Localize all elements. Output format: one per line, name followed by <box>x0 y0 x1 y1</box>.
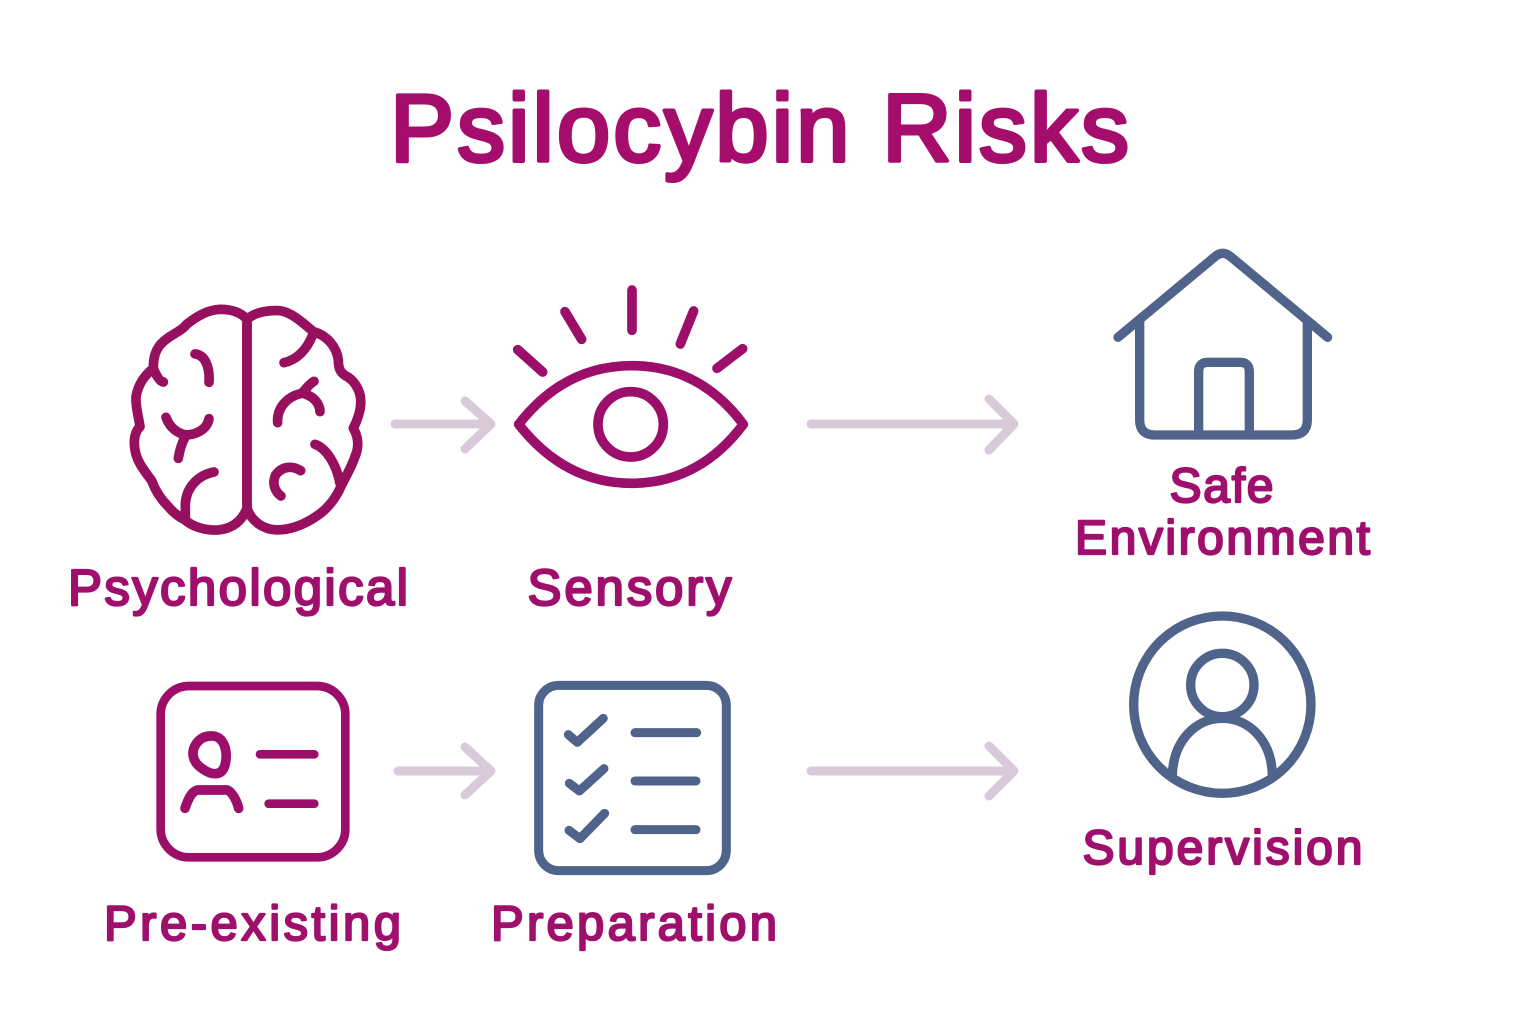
icon: person in circle <box>1134 616 1311 793</box>
arrow: sensory to safe environment <box>811 399 1014 450</box>
label: psychological: Psychological <box>68 559 408 616</box>
label: safe environment <box>1075 460 1370 565</box>
arrow: pre-existing to preparation <box>398 747 491 795</box>
arrow: preparation to supervision <box>811 746 1014 796</box>
arrow: psychological to sensory <box>395 401 491 449</box>
icon: brain <box>134 309 361 530</box>
title: Psilocybin Risks <box>390 75 1129 182</box>
icon: profile card <box>161 686 345 857</box>
label: sensory: Sensory <box>528 559 732 616</box>
label: pre-existing: Pre-existing <box>104 897 401 951</box>
icon: house <box>1118 253 1328 435</box>
label: safe environment: Safe <box>1170 460 1274 513</box>
label: preparation: Preparation <box>491 897 777 951</box>
icon: checklist <box>539 685 726 871</box>
label: supervision: Supervision <box>1082 822 1362 875</box>
icon: eye with rays <box>518 290 743 483</box>
label: safe environment: Environment <box>1075 512 1370 565</box>
